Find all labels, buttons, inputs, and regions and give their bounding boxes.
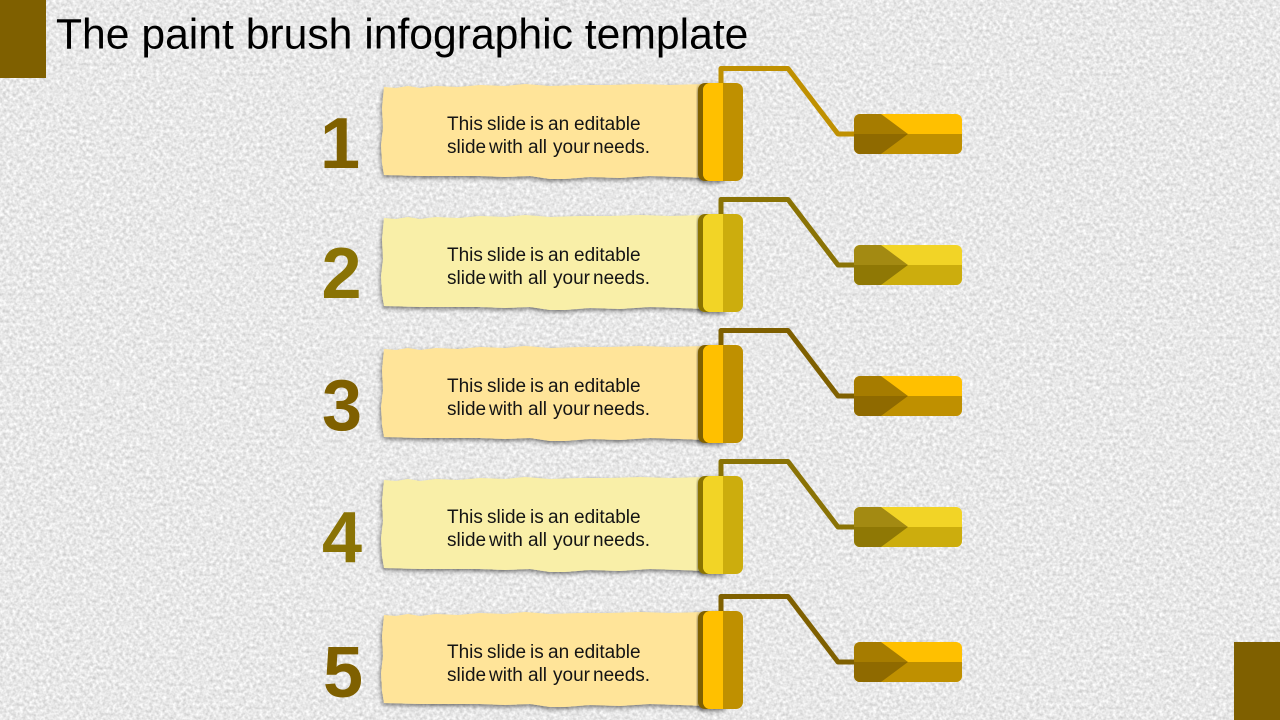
text block: your xyxy=(553,399,591,420)
text block xyxy=(447,642,650,686)
paper strip xyxy=(381,215,705,310)
text block: slide xyxy=(487,114,526,135)
text block: your xyxy=(553,137,591,158)
text block: This xyxy=(447,114,483,135)
text block xyxy=(447,507,650,551)
text block: needs. xyxy=(593,399,650,420)
row 5 xyxy=(323,596,962,713)
wire xyxy=(721,596,856,662)
text block: all xyxy=(528,268,547,289)
text block: This xyxy=(447,376,483,397)
text block: is xyxy=(530,245,544,266)
text block: is xyxy=(530,114,544,135)
paint roller xyxy=(698,345,743,443)
text block: slide xyxy=(487,642,526,663)
corner block: top left xyxy=(0,0,46,78)
text block: all xyxy=(528,137,547,158)
text block: This xyxy=(447,642,483,663)
text block: slide xyxy=(487,507,526,528)
text block xyxy=(447,245,650,289)
text block: needs. xyxy=(593,665,650,686)
number 2: 2 xyxy=(321,234,362,314)
title: The paint brush infographic template xyxy=(56,10,748,58)
text block: with xyxy=(488,399,523,420)
text block: needs. xyxy=(593,137,650,158)
handle xyxy=(854,507,962,547)
text block: an xyxy=(548,114,569,135)
paint roller xyxy=(698,476,743,574)
text block: slide xyxy=(487,376,526,397)
wire xyxy=(721,200,856,265)
paper strip xyxy=(381,346,705,441)
text block: your xyxy=(553,268,591,289)
text block: all xyxy=(528,530,547,551)
text block: slide xyxy=(487,245,526,266)
wire xyxy=(721,68,856,134)
row 4 xyxy=(322,462,962,578)
paint roller xyxy=(698,611,743,709)
text block: slide xyxy=(447,665,486,686)
text block: an xyxy=(548,642,569,663)
text block: needs. xyxy=(593,530,650,551)
row 2 xyxy=(321,200,962,314)
paper strip xyxy=(381,477,705,572)
handle xyxy=(854,376,962,416)
text block: an xyxy=(548,507,569,528)
paint roller xyxy=(698,214,743,312)
handle xyxy=(854,642,962,682)
number 4: 4 xyxy=(322,498,362,578)
text block: slide xyxy=(447,268,486,289)
text block xyxy=(447,376,650,420)
text block: slide xyxy=(447,399,486,420)
text block: This xyxy=(447,507,483,528)
text block: with xyxy=(488,665,523,686)
handle xyxy=(854,114,962,154)
wire xyxy=(721,462,856,527)
number 5: 5 xyxy=(323,633,363,713)
text block: is xyxy=(530,642,544,663)
text block: with xyxy=(488,530,523,551)
number 1: 1 xyxy=(320,104,360,184)
text block: is xyxy=(530,507,544,528)
text block: editable xyxy=(574,245,641,266)
text block xyxy=(447,114,650,158)
paint roller xyxy=(698,83,743,181)
text block: slide xyxy=(447,137,486,158)
text block: This xyxy=(447,245,483,266)
paper strip xyxy=(381,84,705,179)
row 3 xyxy=(322,330,962,446)
text block: all xyxy=(528,399,547,420)
row 1 xyxy=(320,68,962,184)
text block: needs. xyxy=(593,268,650,289)
text block: an xyxy=(548,376,569,397)
paper strip xyxy=(381,612,705,707)
corner block: bottom right xyxy=(1234,642,1280,720)
text block: is xyxy=(530,376,544,397)
text block: with xyxy=(488,268,523,289)
text block: slide xyxy=(447,530,486,551)
number 3: 3 xyxy=(322,366,362,446)
text block: your xyxy=(553,665,591,686)
text block: an xyxy=(548,245,569,266)
text block: editable xyxy=(574,642,641,663)
text block: editable xyxy=(574,376,641,397)
wire xyxy=(721,330,856,396)
text block: all xyxy=(528,665,547,686)
text block: with xyxy=(488,137,523,158)
handle xyxy=(854,245,962,285)
text block: editable xyxy=(574,114,641,135)
text block: editable xyxy=(574,507,641,528)
text block: your xyxy=(553,530,591,551)
